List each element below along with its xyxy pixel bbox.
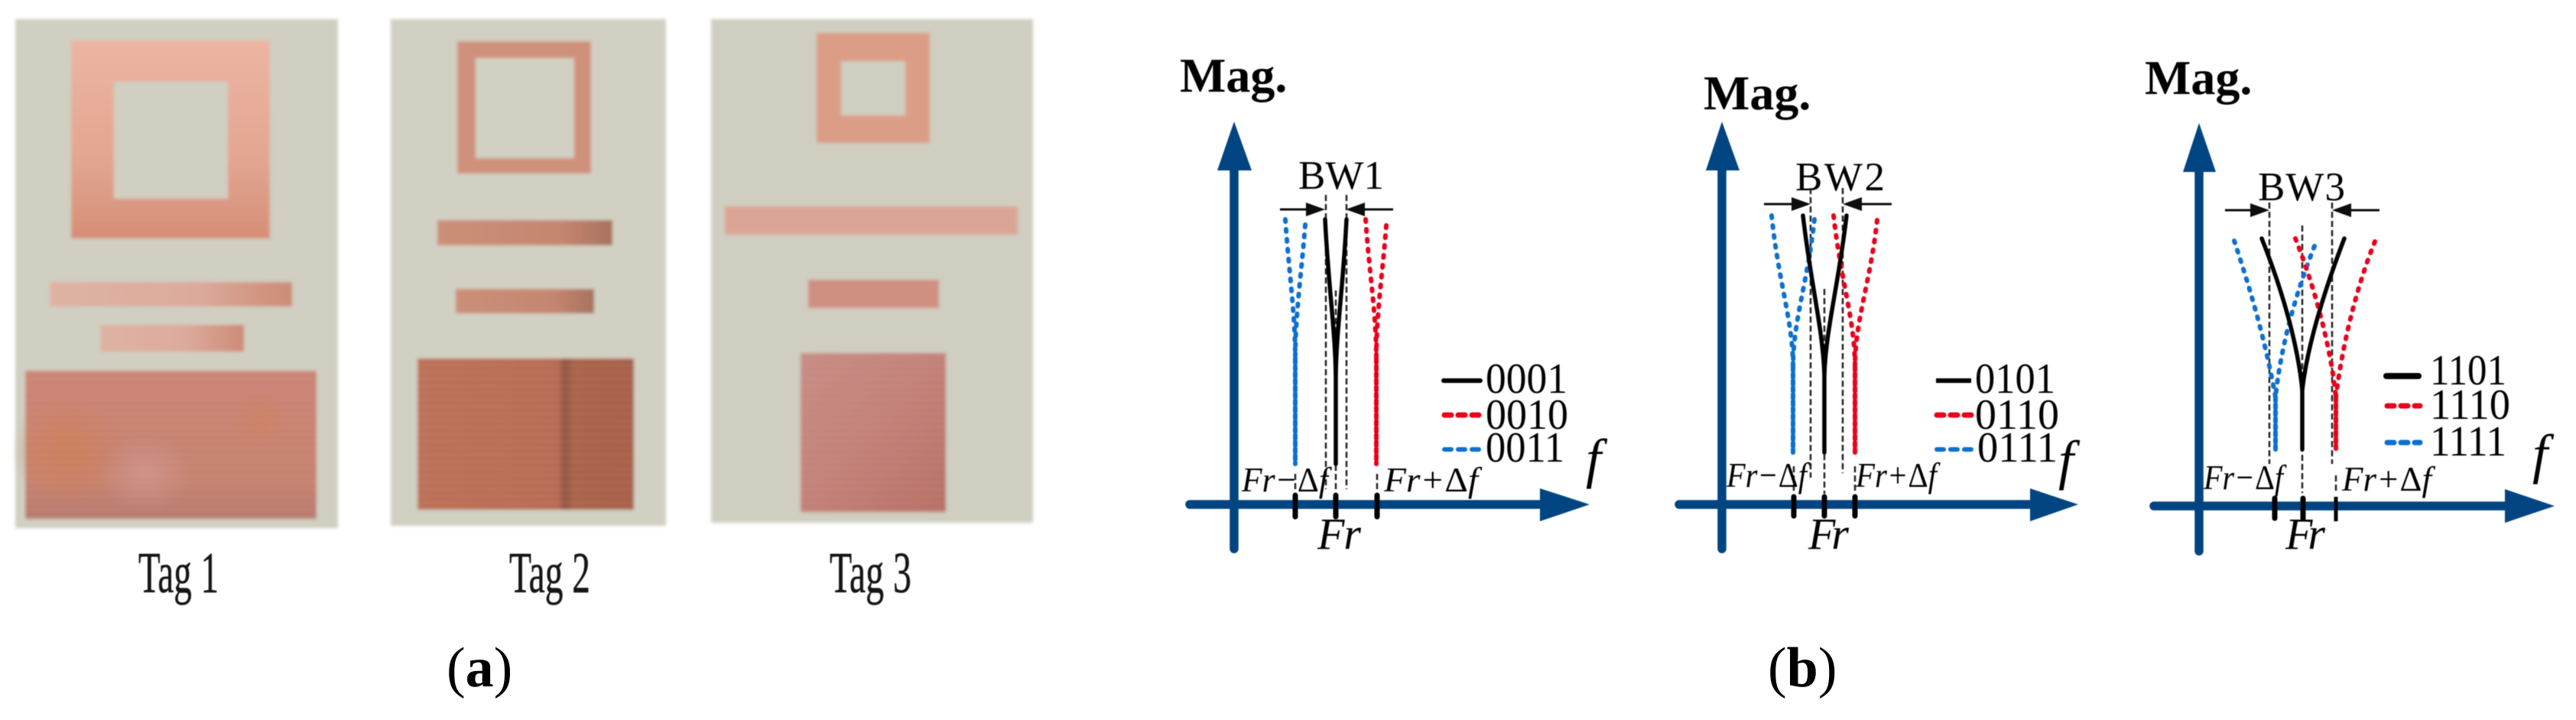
chart: BW1 response bbox=[1180, 48, 1608, 559]
label: Fr: Fr bbox=[1317, 509, 1361, 559]
legend bbox=[1936, 355, 2059, 472]
y axis arrow bbox=[1706, 122, 1740, 549]
label: Fr minus delta f: Fr−Δf bbox=[1726, 456, 1811, 495]
photo: Tag 1 bbox=[11, 19, 338, 528]
legend: 0101 bbox=[1975, 355, 2055, 403]
y axis arrow bbox=[2183, 123, 2216, 551]
y axis label: Mag. bbox=[1704, 66, 1811, 120]
legend: 1101 bbox=[2430, 347, 2506, 394]
label: Tag 1: Tag 1 bbox=[138, 541, 219, 605]
x axis arrow bbox=[1679, 488, 2078, 521]
frequency ticks bbox=[1295, 495, 1377, 517]
panel: tag photos (a) bbox=[11, 19, 1033, 605]
black curves bbox=[1325, 219, 1346, 464]
photo: Tag 2 bbox=[391, 19, 666, 526]
y axis label: Mag. bbox=[1180, 48, 1287, 102]
bandwidth label: BW2 bbox=[1795, 155, 1885, 199]
frequency ticks bbox=[2275, 497, 2336, 521]
bandwidth arrows bbox=[1764, 197, 1892, 211]
legend bbox=[2386, 347, 2510, 465]
label: f axis: f bbox=[2532, 423, 2555, 485]
blue curves bbox=[2234, 241, 2315, 452]
legend: 0010 bbox=[1486, 391, 1568, 439]
label: Fr: Fr bbox=[1808, 509, 1849, 559]
chart: BW3 response bbox=[2145, 50, 2555, 559]
bandwidth label: BW3 bbox=[2258, 165, 2345, 209]
label: Fr minus delta f: Fr−Δf bbox=[2203, 458, 2287, 497]
label: Fr plus delta f: Fr+Δf bbox=[2341, 459, 2436, 498]
label: Tag 2: Tag 2 bbox=[509, 541, 590, 605]
legend bbox=[1444, 355, 1568, 472]
caption: (b): (b) bbox=[1768, 637, 1837, 699]
legend: 1111 bbox=[2430, 418, 2506, 465]
y axis arrow bbox=[1217, 122, 1252, 549]
black curves bbox=[2262, 238, 2344, 449]
chart: BW2 response bbox=[1679, 66, 2081, 559]
x axis arrow bbox=[1190, 488, 1590, 521]
black curves bbox=[1803, 216, 1847, 452]
label: f axis: f bbox=[2058, 430, 2081, 491]
legend: 0001 bbox=[1486, 355, 1567, 403]
legend: 1110 bbox=[2430, 381, 2510, 429]
legend: 0111 bbox=[1977, 424, 2058, 472]
red curves bbox=[1366, 219, 1386, 464]
photo: Tag 3 bbox=[711, 19, 1033, 523]
red curves bbox=[2295, 238, 2375, 449]
caption: (a): (a) bbox=[447, 637, 512, 699]
red curves bbox=[1834, 216, 1877, 452]
dashed guides bbox=[1794, 188, 1855, 494]
legend: 0110 bbox=[1975, 391, 2059, 439]
x axis arrow bbox=[2154, 489, 2555, 523]
dashed guides bbox=[1295, 195, 1377, 492]
label: Fr plus delta f: Fr+Δf bbox=[1855, 456, 1941, 495]
legend: 0011 bbox=[1486, 424, 1564, 472]
label: Fr: Fr bbox=[2285, 509, 2325, 559]
label: Fr minus delta f: Fr−Δf bbox=[1241, 460, 1333, 499]
bandwidth arrows bbox=[1280, 203, 1393, 216]
label: Fr plus delta f: Fr+Δf bbox=[1383, 460, 1483, 499]
bandwidth arrows bbox=[2225, 203, 2379, 217]
blue curves bbox=[1285, 219, 1305, 464]
label: f axis: f bbox=[1586, 428, 1608, 489]
frequency ticks bbox=[1794, 497, 1855, 516]
dashed guides bbox=[2269, 203, 2336, 493]
blue curves bbox=[1772, 216, 1814, 452]
bandwidth label: BW1 bbox=[1298, 154, 1384, 198]
y axis label: Mag. bbox=[2145, 50, 2252, 105]
label: Tag 3: Tag 3 bbox=[830, 541, 911, 605]
